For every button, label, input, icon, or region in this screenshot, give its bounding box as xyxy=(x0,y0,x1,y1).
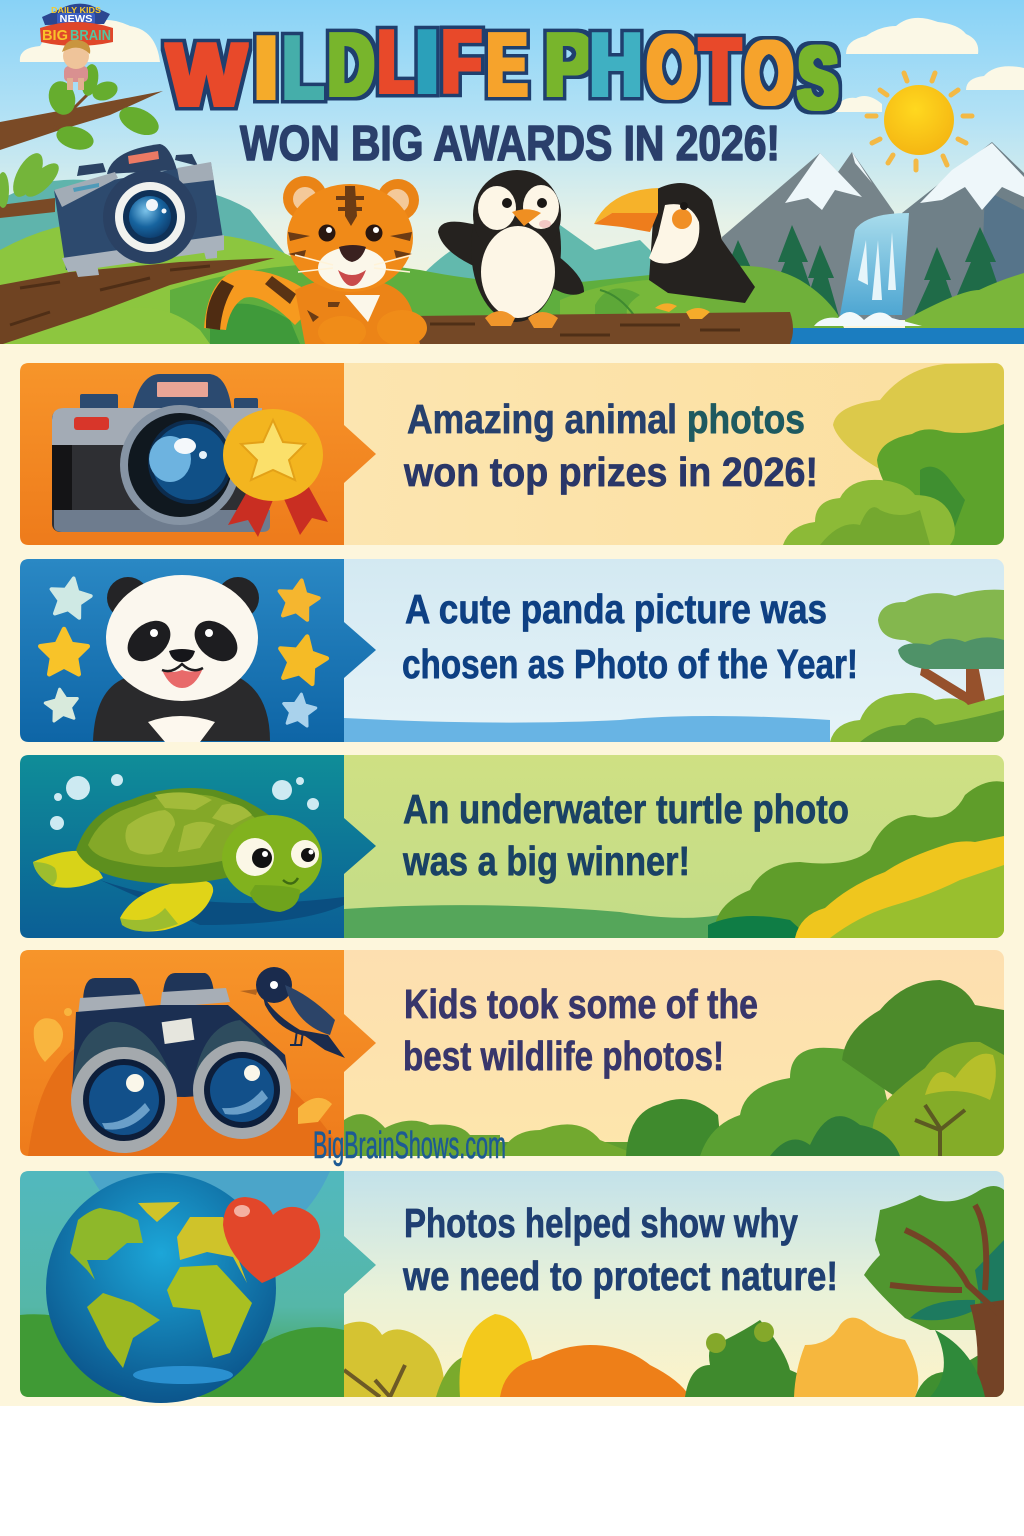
panel 1 right background xyxy=(344,363,1004,545)
panel 3 text: was a big winner! xyxy=(402,838,690,884)
panel 4 text: best wildlife photos! xyxy=(403,1033,724,1079)
logo: BIG xyxy=(42,27,68,44)
tree in panel 5 xyxy=(864,1186,1004,1397)
panel 5 left with arrow xyxy=(20,1171,376,1397)
panel 3 text: An underwater turtle photo xyxy=(403,786,849,832)
turtle shadow xyxy=(100,880,344,925)
panel 1: award camera xyxy=(20,363,1004,545)
panel 2 right background xyxy=(344,559,1004,742)
header scene xyxy=(0,0,1024,348)
panel 2: panda xyxy=(20,559,1004,742)
title: W xyxy=(167,25,246,124)
back hills xyxy=(0,180,700,344)
left mid branch with leaves xyxy=(0,153,59,218)
watermark: BigBrainShows.com xyxy=(313,1125,506,1167)
panel 1 left with arrow xyxy=(20,363,376,545)
tree in panel 2 xyxy=(878,590,1004,705)
decorative yellow splashes xyxy=(34,1008,332,1124)
logo xyxy=(40,4,113,46)
tiger xyxy=(204,176,427,348)
title: I xyxy=(254,18,278,117)
title: O xyxy=(647,17,697,116)
panel 1 text xyxy=(403,396,818,495)
mountains xyxy=(722,142,1024,320)
panel 4 right background xyxy=(20,950,1004,1156)
panel 2 text xyxy=(402,586,858,687)
panel 5 text xyxy=(402,1200,838,1299)
title: P xyxy=(545,15,592,114)
toucan xyxy=(594,183,755,319)
green hills xyxy=(722,266,1024,328)
panel 3: turtle xyxy=(20,755,1004,938)
river xyxy=(790,328,1024,344)
panel 5: globe and heart xyxy=(20,1171,1004,1403)
binoculars xyxy=(71,973,291,1153)
shrubs xyxy=(170,288,640,344)
heart xyxy=(223,1197,320,1283)
pine trees xyxy=(726,225,1003,320)
panel 5 text: Photos helped show why xyxy=(404,1200,798,1246)
log xyxy=(410,312,793,344)
panel 5 right background xyxy=(20,1171,1004,1397)
panel 4 shade hill xyxy=(28,1040,344,1156)
panel 3 left with arrow xyxy=(20,755,376,938)
panel 3 right background xyxy=(20,755,1004,938)
title: I xyxy=(415,12,439,111)
stars xyxy=(40,575,330,727)
sky xyxy=(0,0,1024,344)
panel 5 sky arc and ground xyxy=(20,1171,344,1397)
panel 5 text: we need to protect nature! xyxy=(402,1253,838,1299)
panda icon xyxy=(93,575,270,742)
panel 2 text: A cute panda picture was xyxy=(405,586,827,632)
panel 4 left with arrow xyxy=(20,950,376,1156)
turtle xyxy=(33,788,322,932)
title: D xyxy=(328,15,374,114)
panel 4 text xyxy=(403,981,758,1079)
logo: BRAIN xyxy=(70,27,111,44)
panel 5 bushes xyxy=(344,1314,918,1397)
clouds xyxy=(20,18,1024,112)
title: E xyxy=(487,15,527,114)
panel 4 text: Kids took some of the xyxy=(404,981,758,1027)
small bird xyxy=(240,967,345,1058)
panel 4 bushes xyxy=(344,980,1004,1156)
penguin xyxy=(438,170,584,328)
sun xyxy=(867,73,972,170)
medal xyxy=(223,409,328,537)
title xyxy=(167,12,838,127)
title: F xyxy=(442,12,481,111)
kid mascot xyxy=(62,40,90,90)
title: T xyxy=(700,20,740,119)
waterfall xyxy=(814,213,922,326)
subtitle: WON BIG AWARDS IN 2026! xyxy=(240,117,780,171)
title: S xyxy=(798,28,838,127)
logo: NEWS xyxy=(60,14,93,25)
title: H xyxy=(590,15,642,114)
panel 2 text: chosen as Photo of the Year! xyxy=(402,641,858,687)
logo: DAILY KIDS xyxy=(51,6,102,15)
title: L xyxy=(378,12,416,111)
globe xyxy=(46,1173,276,1403)
panel 1 text: won top prizes in 2026! xyxy=(403,449,818,495)
title: L xyxy=(283,18,323,117)
title: O xyxy=(745,23,793,122)
panel 2 left with arrow xyxy=(20,559,376,742)
panel 3 text xyxy=(402,786,849,884)
upper branch xyxy=(0,63,163,154)
lower branch xyxy=(0,258,275,345)
camera xyxy=(54,144,224,277)
panel 4: binoculars xyxy=(20,950,1004,1156)
cream panel area xyxy=(0,344,1024,1406)
bubbles xyxy=(50,774,319,830)
panel 1 text: Amazing animal photos xyxy=(407,396,805,442)
camera icon xyxy=(52,374,270,532)
